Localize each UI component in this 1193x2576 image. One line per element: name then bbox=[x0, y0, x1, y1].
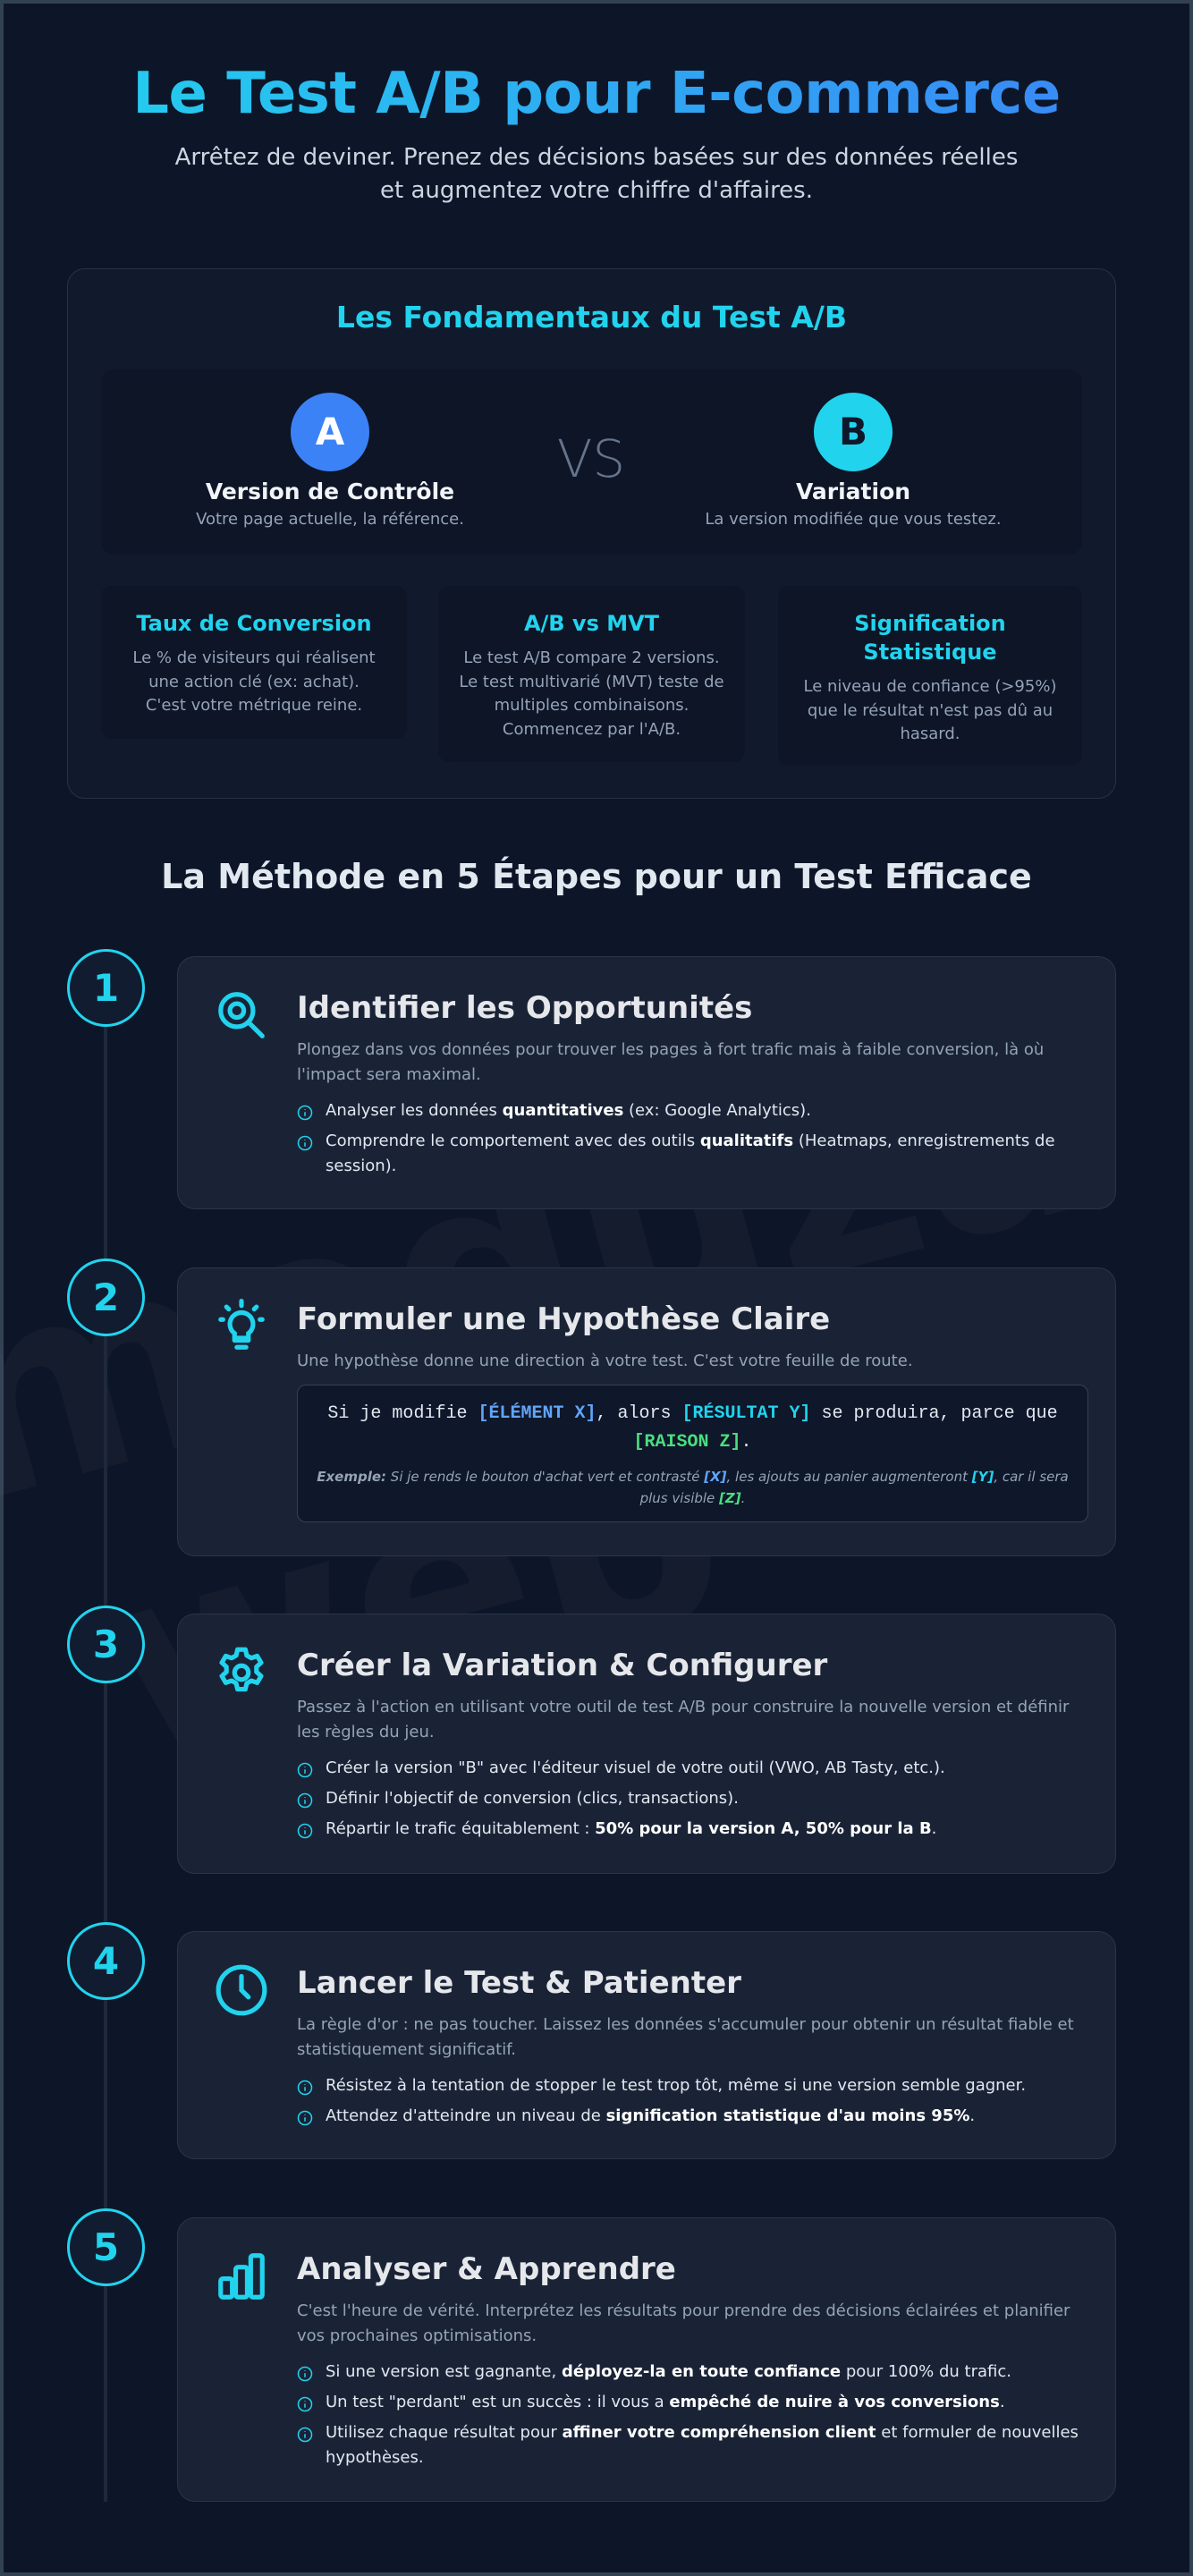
card: step 5: C'est l'heure de vérité. Interprétez les résultats pour prendre des décisions éclairées et planifier vos prochaines optimisations. bbox=[297, 2301, 1070, 2345]
title: Le Test A/B pour E-commerce bbox=[132, 61, 1061, 127]
card: step 5: Utilisez chaque résultat pour affiner votre compréhension client et formuler de nouvelles hypothèses. bbox=[326, 2423, 1079, 2467]
heading: fundamentals: Les Fondamentaux du Test A/B bbox=[336, 300, 847, 335]
panel: fundamentals bbox=[67, 268, 1116, 799]
icon: search bbox=[218, 992, 265, 1038]
step number 4 bbox=[67, 1922, 145, 2000]
icon: clock bbox=[216, 1964, 267, 2016]
card: step 1: Plongez dans vos données pour trouver les pages à fort trafic mais à faible conversion, là où l'impact sera maximal. bbox=[297, 1040, 1044, 1084]
card: step 2: Formuler une Hypothèse Claire bbox=[297, 1301, 830, 1337]
VS text: VS bbox=[557, 428, 625, 489]
heading: 5 steps: La Méthode en 5 Étapes pour un Test Efficace bbox=[161, 857, 1032, 896]
card: step 3: Créer la version "B" avec l'éditeur visuel de votre outil (VWO, AB Tasty, etc.). bbox=[326, 1758, 945, 1777]
card: statistical significance bbox=[778, 586, 1082, 766]
card: statistical significance: Le niveau de confiance (>95%) que le résultat n'est pas dû au hasard. bbox=[804, 677, 1056, 743]
icon: lightbulb bbox=[218, 1299, 265, 1350]
label: control version: Version de Contrôle bbox=[206, 479, 454, 504]
step number 5 bbox=[67, 2208, 145, 2286]
step number 5: 5 bbox=[93, 2225, 119, 2269]
step number 2 bbox=[67, 1258, 145, 1336]
label: variation: Variation bbox=[796, 479, 910, 504]
card: step 5: Analyser & Apprendre bbox=[297, 2251, 676, 2287]
hypothesis formula box: Exemple: Si je rends le bouton d'achat vert et contrasté [X], les ajouts au panier augmenteront [Y], car il sera plus visible [Z]. bbox=[317, 1469, 1069, 1506]
icon: A circle: A bbox=[316, 410, 344, 453]
card: step 2: Une hypothèse donne une direction à votre test. C'est votre feuille de route. bbox=[297, 1352, 913, 1370]
card: conversion rate: Taux de Conversion bbox=[136, 611, 372, 636]
subtitle: Arrêtez de deviner. Prenez des décisions basées sur des données réelles bbox=[175, 144, 1018, 171]
card: A/B vs MVT bbox=[438, 586, 745, 762]
A vs B comparison bbox=[101, 369, 1082, 555]
hypothesis formula box: Si je modifie [ÉLÉMENT X], alors [RÉSULTAT Y] se produira, parce que [RAISON Z]. bbox=[327, 1403, 1058, 1453]
subtitle: et augmentez votre chiffre d'affaires. bbox=[380, 177, 813, 204]
icon: A circle bbox=[291, 393, 369, 471]
card: step 5: Si une version est gagnante, déployez-la en toute confiance pour 100% du trafic. bbox=[326, 2362, 1011, 2381]
label: control version bbox=[196, 479, 464, 529]
card: step 1: Analyser les données quantitatives (ex: Google Analytics). bbox=[326, 1101, 811, 1120]
card: conversion rate: Le % de visiteurs qui réalisent une action clé (ex: achat). C'est votre métrique reine. bbox=[132, 648, 376, 715]
card: step 4: Résistez à la tentation de stopper le test trop tôt, même si une version semble gagner. bbox=[326, 2076, 1026, 2095]
card: step 4: Attendez d'atteindre un niveau de signification statistique d'au moins 95%. bbox=[326, 2106, 975, 2125]
watermark: web bbox=[72, 1363, 754, 1826]
card: A/B vs MVT: Le test A/B compare 2 versions. Le test multivarié (MVT) teste de multiples combinaisons. Commencez par l'A/B. bbox=[459, 648, 724, 739]
label: variation: La version modifiée que vous testez. bbox=[705, 510, 1002, 529]
card: step 3: Créer la Variation & Configurer bbox=[297, 1648, 827, 1683]
card: step 1 bbox=[177, 956, 1116, 1209]
card: step 1: Comprendre le comportement avec des outils qualitatifs (Heatmaps, enregistrements de session). bbox=[326, 1131, 1055, 1175]
card: step 3: Répartir le trafic équitablement : 50% pour la version A, 50% pour la B. bbox=[326, 1819, 936, 1838]
card: step 5: Un test "perdant" est un succès : il vous a empêché de nuire à vos conversions. bbox=[326, 2393, 1005, 2411]
card: step 3 bbox=[177, 1614, 1116, 1874]
card: statistical significance: Signification Statistique bbox=[854, 611, 1006, 665]
step number 2: 2 bbox=[93, 1275, 119, 1319]
card: step 3: Passez à l'action en utilisant votre outil de test A/B pour construire la nouvelle version et définir les règles du jeu. bbox=[297, 1698, 1069, 1741]
card: step 3: Définir l'objectif de conversion (clics, transactions). bbox=[326, 1789, 739, 1808]
step number 3: 3 bbox=[93, 1623, 119, 1666]
step number 1 bbox=[67, 949, 145, 1027]
icon: B circle: B bbox=[839, 410, 867, 453]
card: step 4: Lancer le Test & Patienter bbox=[297, 1965, 741, 2001]
timeline line bbox=[104, 987, 107, 2502]
watermark bbox=[0, 966, 1193, 1843]
hypothesis formula box bbox=[297, 1385, 1088, 1522]
label: control version: Votre page actuelle, la référence. bbox=[196, 510, 464, 529]
subtitle bbox=[175, 144, 1018, 204]
step number 1: 1 bbox=[93, 966, 119, 1010]
card: step 2 bbox=[177, 1267, 1116, 1556]
icon: B circle bbox=[814, 393, 893, 471]
card: step 4 bbox=[177, 1931, 1116, 2159]
icon: bar chart bbox=[218, 2253, 265, 2300]
icon: gear bbox=[219, 1648, 264, 1692]
label: variation bbox=[705, 479, 1002, 529]
card: step 4: La règle d'or : ne pas toucher. Laissez les données s'accumuler pour obtenir un résultat fiable et statistiquement significatif. bbox=[297, 2015, 1074, 2059]
step number 3 bbox=[67, 1606, 145, 1683]
step number 4: 4 bbox=[93, 1939, 119, 1983]
card: step 5 bbox=[177, 2217, 1116, 2502]
card: step 1: Identifier les Opportunités bbox=[297, 990, 752, 1026]
card: conversion rate bbox=[101, 586, 407, 739]
card: A/B vs MVT: A/B vs MVT bbox=[524, 611, 659, 636]
